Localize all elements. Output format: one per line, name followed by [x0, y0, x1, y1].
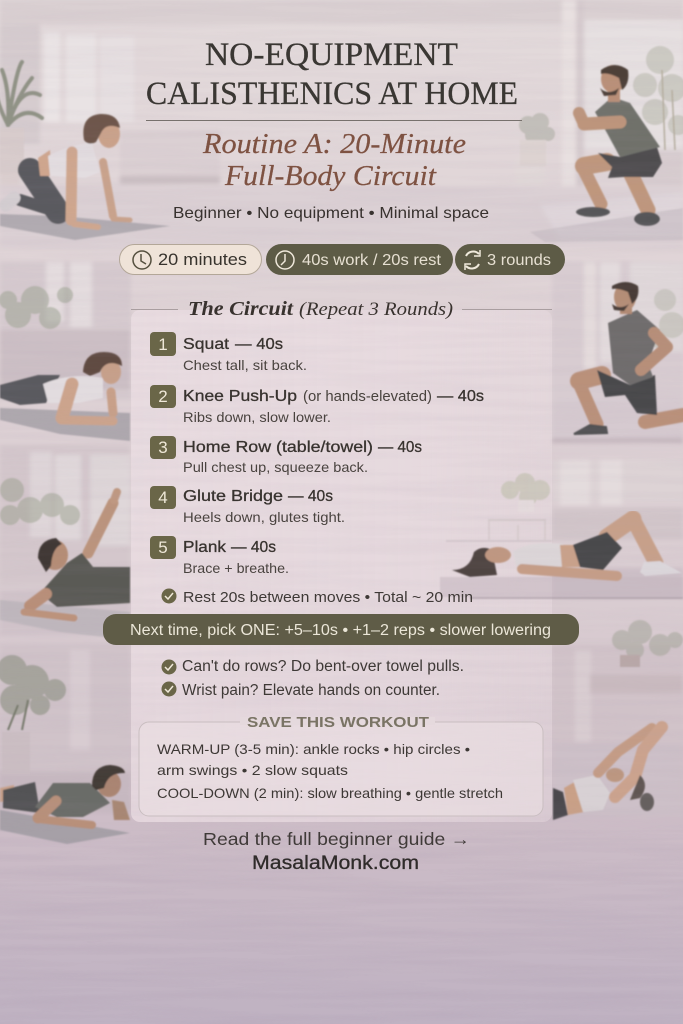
plant and side table behind woman in bridge [446, 473, 552, 542]
step 2: knee push-up: Knee Push-Up [183, 388, 297, 405]
step 2: knee push-up: Ribs down, slow lower. [183, 409, 331, 425]
step 1: squat: — 40s [235, 336, 283, 353]
step 1: squat: Chest tall, sit back. [183, 357, 307, 373]
heading: save this workout: SAVE THIS WORKOUT [247, 714, 429, 731]
call to action: Read the full beginner guide → [203, 829, 470, 849]
step 5: plank: Brace + breathe. [183, 560, 289, 576]
banner: next time [103, 614, 579, 645]
step 1: squat: Squat [183, 336, 230, 353]
step 1: squat: 1 [158, 335, 168, 354]
plant: second row right [650, 289, 683, 348]
pill: 20 minutes: 20 minutes [158, 250, 247, 269]
pill: work and rest: 40s work / 20s rest [302, 252, 442, 269]
room scene: second row [0, 262, 131, 400]
step 4: glute bridge: 4 [158, 488, 168, 507]
pill: rounds: 3 rounds [487, 252, 551, 269]
warm-up text: WARM-UP (3-5 min): ankle rocks • hip circles • [157, 741, 470, 757]
step 2: knee push-up [150, 385, 484, 425]
heading: the circuit [188, 298, 453, 320]
step 5: plank [150, 536, 289, 576]
pill: work and rest [266, 244, 453, 275]
title: NO-EQUIPMENT [205, 37, 458, 73]
step 4: glute bridge: Heels down, glutes tight. [183, 509, 345, 525]
room scene: top [0, 0, 683, 817]
illustration: man squatting [530, 65, 683, 242]
step 3: home row: Pull chest up, squeeze back. [183, 459, 368, 475]
panel: circuit card [131, 310, 552, 822]
step 4: glute bridge: Glute Bridge [183, 488, 283, 505]
illustration: man in lunge [574, 282, 683, 434]
panel: save this workout [139, 714, 543, 816]
illustration: woman on all fours [0, 114, 170, 240]
heading: the circuit: The Circuit [188, 298, 295, 320]
step 5: plank: 5 [158, 538, 168, 557]
step 4: glute bridge: — 40s [288, 488, 333, 505]
step 2: knee push-up: (or hands-elevated) [303, 388, 432, 405]
plant: second row left [0, 286, 73, 329]
step 3: home row: — 40s [378, 439, 422, 456]
heading: the circuit: (Repeat 3 Rounds) [299, 300, 453, 320]
tip: rows: Can't do rows? Do bent-over towel pulls. [182, 658, 464, 675]
step 2: knee push-up: — 40s [437, 388, 484, 405]
tip: wrists: Wrist pain? Elevate hands on counter. [182, 682, 440, 699]
warm-up text [157, 741, 470, 778]
pill: rounds [455, 244, 565, 275]
cool-down text: COOL-DOWN (2 min): slow breathing • gentle stretch [157, 785, 503, 801]
banner: next time: Next time, pick ONE: +5–10s • +1–2 reps • slower lowering [130, 622, 551, 639]
room scene: fourth row [0, 645, 130, 780]
pill: 20 minutes [120, 244, 262, 274]
plant: fourth row left [0, 655, 66, 715]
title: CALISTHENICS AT HOME [146, 76, 518, 112]
tagline: Beginner • No equipment • Minimal space [173, 205, 489, 222]
subtitle [202, 128, 466, 192]
step 3: home row: Home Row (table/towel) [183, 439, 373, 456]
step 2: knee push-up: 2 [158, 387, 168, 406]
illustration: woman in glute bridge [440, 519, 683, 599]
subtitle: Full-Body Circuit [224, 160, 437, 192]
icon: clock [133, 251, 151, 269]
rest note: Rest 20s between moves • Total ~ 20 min [183, 589, 473, 606]
warm-up text: arm swings • 2 slow squats [157, 762, 348, 778]
illustration: woman lying with arms raised [553, 727, 662, 820]
call to action: MasalaMonk.com [252, 853, 419, 874]
step 5: plank: Plank [183, 539, 227, 556]
call to action [203, 829, 470, 874]
plant: fourth row right [612, 620, 683, 659]
step 1: squat [150, 332, 307, 373]
plant: top centre-right [519, 113, 555, 145]
plant: top left palm [0, 62, 42, 125]
step 5: plank: — 40s [231, 539, 276, 556]
potted plants [0, 46, 683, 774]
step 3: home row [150, 436, 422, 475]
illustration: man lying prone [0, 765, 130, 844]
plant: third row left [0, 478, 80, 525]
illustration: woman in forearm plank [0, 352, 130, 441]
room scene: third row [0, 445, 130, 585]
illustration: man in side plank reaching up [0, 492, 130, 640]
plant: top right tree [633, 46, 683, 135]
subtitle: Routine A: 20-Minute [202, 128, 466, 160]
title [146, 37, 518, 112]
step 3: home row: 3 [158, 438, 168, 457]
icon: timer [276, 251, 294, 269]
step 4: glute bridge [150, 486, 345, 525]
icon: repeat arrows [465, 250, 480, 270]
